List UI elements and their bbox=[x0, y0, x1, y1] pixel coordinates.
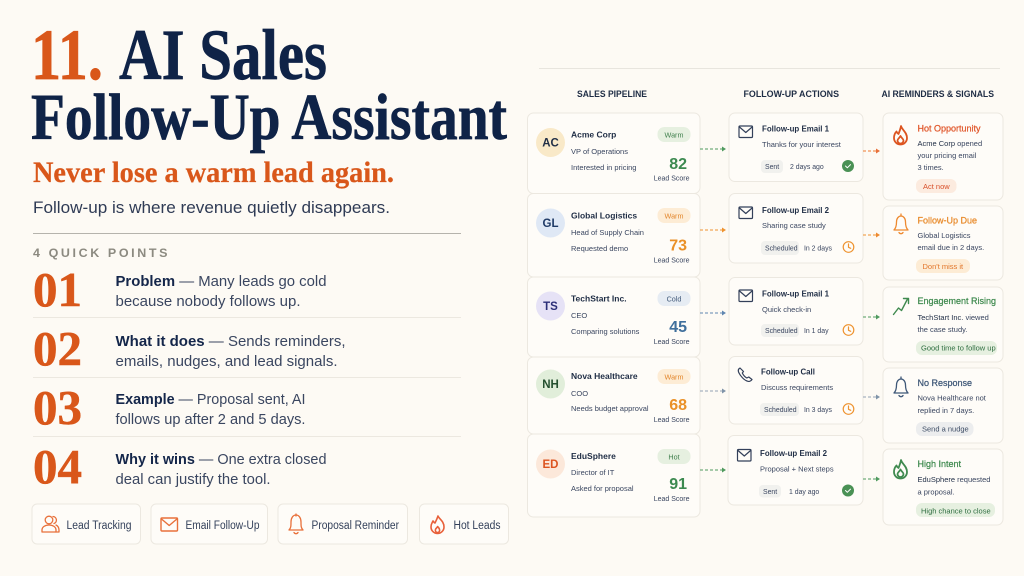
point 03 bbox=[33, 380, 306, 435]
reminder: Follow-Up Due: Follow-Up Due bbox=[918, 216, 977, 226]
action card: Proposal email: 1 day ago bbox=[789, 489, 819, 496]
point 04: Why it wins — One extra closed bbox=[116, 451, 326, 468]
action card: Follow-up Email 2: Sharing case study bbox=[762, 221, 826, 230]
chip: proposal reminder bbox=[278, 504, 408, 544]
lead card: TechStart Inc.: TS bbox=[543, 301, 558, 313]
lead card: TechStart Inc.: CEO bbox=[571, 311, 587, 320]
title: AI Sales bbox=[119, 15, 327, 95]
arrow: action 3 to reminder bbox=[863, 314, 880, 320]
action card: Follow-up Email 2: Follow-up Email 2 bbox=[762, 206, 830, 215]
point 01: 01 bbox=[33, 262, 82, 317]
point 01 bbox=[33, 262, 326, 317]
action card: Quick check-in email: Scheduled bbox=[765, 328, 798, 335]
chip: lead tracking: Lead Tracking bbox=[66, 520, 132, 532]
action card: Follow-up Email 2: Scheduled bbox=[765, 245, 798, 252]
point 01: because nobody follows up. bbox=[116, 293, 300, 310]
point 04: 04 bbox=[33, 439, 82, 494]
point 03: Example — Proposal sent, AI bbox=[116, 391, 306, 408]
reminder: Follow-Up Due: Global Logistics bbox=[918, 231, 971, 240]
chip: hot leads bbox=[420, 504, 508, 544]
lead card: Nova Healthcare: NH bbox=[542, 379, 559, 391]
action card: Follow-up Email 1: 2 days ago bbox=[790, 164, 824, 171]
reminder: Engagement Rising: Good time to follow up bbox=[921, 344, 996, 353]
action card: Quick check-in email: In 1 day bbox=[804, 328, 829, 335]
point 03: 03 bbox=[33, 380, 82, 435]
action card: Follow-up Call: Scheduled bbox=[764, 407, 797, 414]
action card: Follow-up Email 1 bbox=[729, 113, 863, 182]
lead card: Acme Corp: 82 bbox=[669, 156, 687, 173]
point 04 bbox=[33, 439, 326, 494]
column heading: sales pipeline: SALES PIPELINE bbox=[577, 89, 647, 99]
reminder: No Response: No Response bbox=[918, 378, 972, 388]
action card: Follow-up Email 1: Follow-up Email 1 bbox=[762, 125, 830, 134]
reminder: Hot Opportunity bbox=[883, 113, 1003, 200]
reminder: Hot Opportunity: Hot Opportunity bbox=[918, 124, 981, 134]
reminder: Hot Opportunity: your pricing email bbox=[918, 151, 977, 160]
column heading: follow-up actions: FOLLOW-UP ACTIONS bbox=[744, 89, 839, 99]
arrow: lead 5 to action bbox=[700, 468, 726, 472]
point 02: emails, nudges, and lead signals. bbox=[116, 353, 338, 370]
reminder: Follow-Up Due bbox=[883, 206, 1003, 280]
reminder: High Intent bbox=[883, 449, 1003, 525]
action card: Quick check-in email bbox=[729, 278, 863, 345]
title bbox=[31, 15, 507, 154]
reminder: High Intent: a proposal. bbox=[918, 488, 955, 497]
action card: Follow-up Email 1: Sent bbox=[765, 164, 779, 171]
reminder: No Response bbox=[883, 368, 1003, 443]
reminder: Follow-Up Due: Don't miss it bbox=[922, 262, 964, 271]
lead card: Acme Corp: Warm bbox=[665, 130, 683, 139]
chip: proposal reminder: Proposal Reminder bbox=[312, 520, 399, 532]
action card: Quick check-in email: Quick check-in bbox=[762, 305, 811, 314]
point 01: Problem — Many leads go cold bbox=[116, 273, 326, 290]
reminder: Engagement Rising: Engagement Rising bbox=[918, 296, 996, 306]
arrow: lead 3 to action bbox=[700, 310, 726, 316]
lead card: Global Logistics: Head of Supply Chain bbox=[571, 228, 644, 237]
reminder: No Response: replied in 7 days. bbox=[918, 406, 974, 415]
lead card: Global Logistics: GL bbox=[543, 218, 558, 230]
action card: Follow-up Call: Discuss requirements bbox=[761, 383, 833, 392]
arrow: lead 4 to action bbox=[700, 388, 726, 394]
lead card: Nova Healthcare: Needs budget approval bbox=[571, 404, 649, 413]
lead card: Global Logistics: 73 bbox=[669, 238, 687, 254]
reminder: Hot Opportunity: Act now bbox=[923, 182, 950, 191]
reminder: Engagement Rising bbox=[883, 287, 1003, 362]
lead card: Global Logistics: Lead Score bbox=[654, 258, 690, 265]
action card: Quick check-in email: Follow-up Email 1 bbox=[762, 290, 830, 299]
lead card: Acme Corp: Lead Score bbox=[654, 176, 690, 182]
action card: Proposal email: Proposal + Next steps bbox=[760, 465, 834, 474]
lead card: TechStart Inc.: Cold bbox=[667, 294, 681, 303]
lead card: TechStart Inc.: Lead Score bbox=[654, 339, 690, 346]
action card: Follow-up Email 2: In 2 days bbox=[804, 245, 833, 252]
lead card: EduSphere: Asked for proposal bbox=[571, 484, 634, 493]
chip: email follow-up bbox=[151, 504, 268, 544]
lead card: Nova Healthcare bbox=[528, 357, 700, 434]
lead card: Acme Corp: Interested in pricing bbox=[571, 163, 636, 172]
arrow: action 1 to reminder bbox=[863, 148, 880, 154]
lead card: Global Logistics: Warm bbox=[665, 211, 683, 220]
lead card: EduSphere: Director of IT bbox=[571, 468, 615, 477]
lead card: Nova Healthcare: COO bbox=[571, 389, 588, 398]
lead card: EduSphere: EduSphere bbox=[571, 451, 616, 461]
lead card: TechStart Inc.: 45 bbox=[669, 319, 687, 336]
chip: lead tracking bbox=[32, 504, 140, 544]
lead card: Nova Healthcare: Nova Healthcare bbox=[571, 371, 638, 381]
action card: Proposal email: Follow-up Email 2 bbox=[760, 449, 828, 458]
reminder: Follow-Up Due: email due in 2 days. bbox=[918, 243, 984, 252]
chip: email follow-up: Email Follow-Up bbox=[186, 520, 260, 532]
arrow: action 2 to reminder bbox=[863, 232, 880, 238]
lead card: EduSphere: 91 bbox=[669, 476, 687, 493]
reminder: No Response: Send a nudge bbox=[922, 425, 969, 434]
section label: 4 QUICK POINTS bbox=[33, 246, 170, 260]
reminder: Hot Opportunity: 3 times. bbox=[918, 163, 944, 172]
point 02 bbox=[33, 321, 346, 376]
action card: Follow-up Call bbox=[729, 356, 863, 424]
lead card: Nova Healthcare: 68 bbox=[669, 397, 687, 414]
title: Follow-Up Assistant bbox=[31, 81, 507, 154]
reminder: High Intent: High Intent bbox=[918, 459, 962, 469]
chip: hot leads: Hot Leads bbox=[454, 520, 501, 532]
lead card: Global Logistics: Global Logistics bbox=[571, 211, 637, 221]
lead card: TechStart Inc. bbox=[528, 277, 700, 357]
subtitle: Never lose a warm lead again. bbox=[33, 156, 394, 189]
lead card: Acme Corp: Acme Corp bbox=[571, 130, 616, 140]
lead card: Nova Healthcare: Lead Score bbox=[654, 417, 690, 424]
lead card: Acme Corp: VP of Operations bbox=[571, 147, 628, 156]
reminder: Engagement Rising: the case study. bbox=[918, 325, 967, 334]
arrow: lead 2 to action bbox=[700, 228, 726, 232]
action card: Proposal email: Sent bbox=[763, 489, 777, 496]
lead card: EduSphere: Lead Score bbox=[654, 496, 690, 503]
action card: Follow-up Email 2 bbox=[729, 194, 863, 263]
action card: Follow-up Call: Follow-up Call bbox=[761, 368, 815, 377]
lead card: Nova Healthcare: Warm bbox=[665, 372, 683, 381]
point 02: What it does — Sends reminders, bbox=[116, 333, 346, 350]
point 04: deal can justify the tool. bbox=[116, 471, 270, 488]
action card: Follow-up Call: In 3 days bbox=[804, 407, 833, 414]
reminder: No Response: Nova Healthcare not bbox=[918, 394, 987, 403]
action card: Follow-up Email 1: Thanks for your interest bbox=[762, 140, 842, 149]
lead card: EduSphere bbox=[528, 434, 700, 517]
lead card: Global Logistics: Requested demo bbox=[571, 244, 628, 253]
reminder: Engagement Rising: TechStart Inc. viewed bbox=[918, 313, 989, 322]
lead card: EduSphere: ED bbox=[543, 459, 558, 471]
lead card: EduSphere: Hot bbox=[668, 452, 680, 461]
point 02: 02 bbox=[33, 321, 82, 376]
lead card: Acme Corp bbox=[528, 113, 700, 194]
reminder: Hot Opportunity: Acme Corp opened bbox=[918, 139, 982, 148]
action card: Proposal email bbox=[728, 436, 863, 505]
lead card: Global Logistics bbox=[528, 194, 700, 277]
title: 11. bbox=[31, 15, 103, 95]
arrow: action 5 to reminder bbox=[863, 476, 880, 482]
reminder: High Intent: EduSphere requested bbox=[918, 475, 990, 484]
column heading: AI reminders: AI REMINDERS & SIGNALS bbox=[882, 89, 994, 99]
tagline: Follow-up is where revenue quietly disappears. bbox=[33, 198, 390, 217]
arrow: action 4 to reminder bbox=[863, 394, 880, 400]
point 03: follows up after 2 and 5 days. bbox=[116, 411, 306, 428]
lead card: TechStart Inc.: Comparing solutions bbox=[571, 327, 640, 336]
arrow: lead 1 to action bbox=[700, 146, 726, 152]
reminder: High Intent: High chance to close bbox=[921, 507, 991, 516]
lead card: TechStart Inc.: TechStart Inc. bbox=[571, 294, 627, 304]
lead card: Acme Corp: AC bbox=[542, 138, 559, 150]
